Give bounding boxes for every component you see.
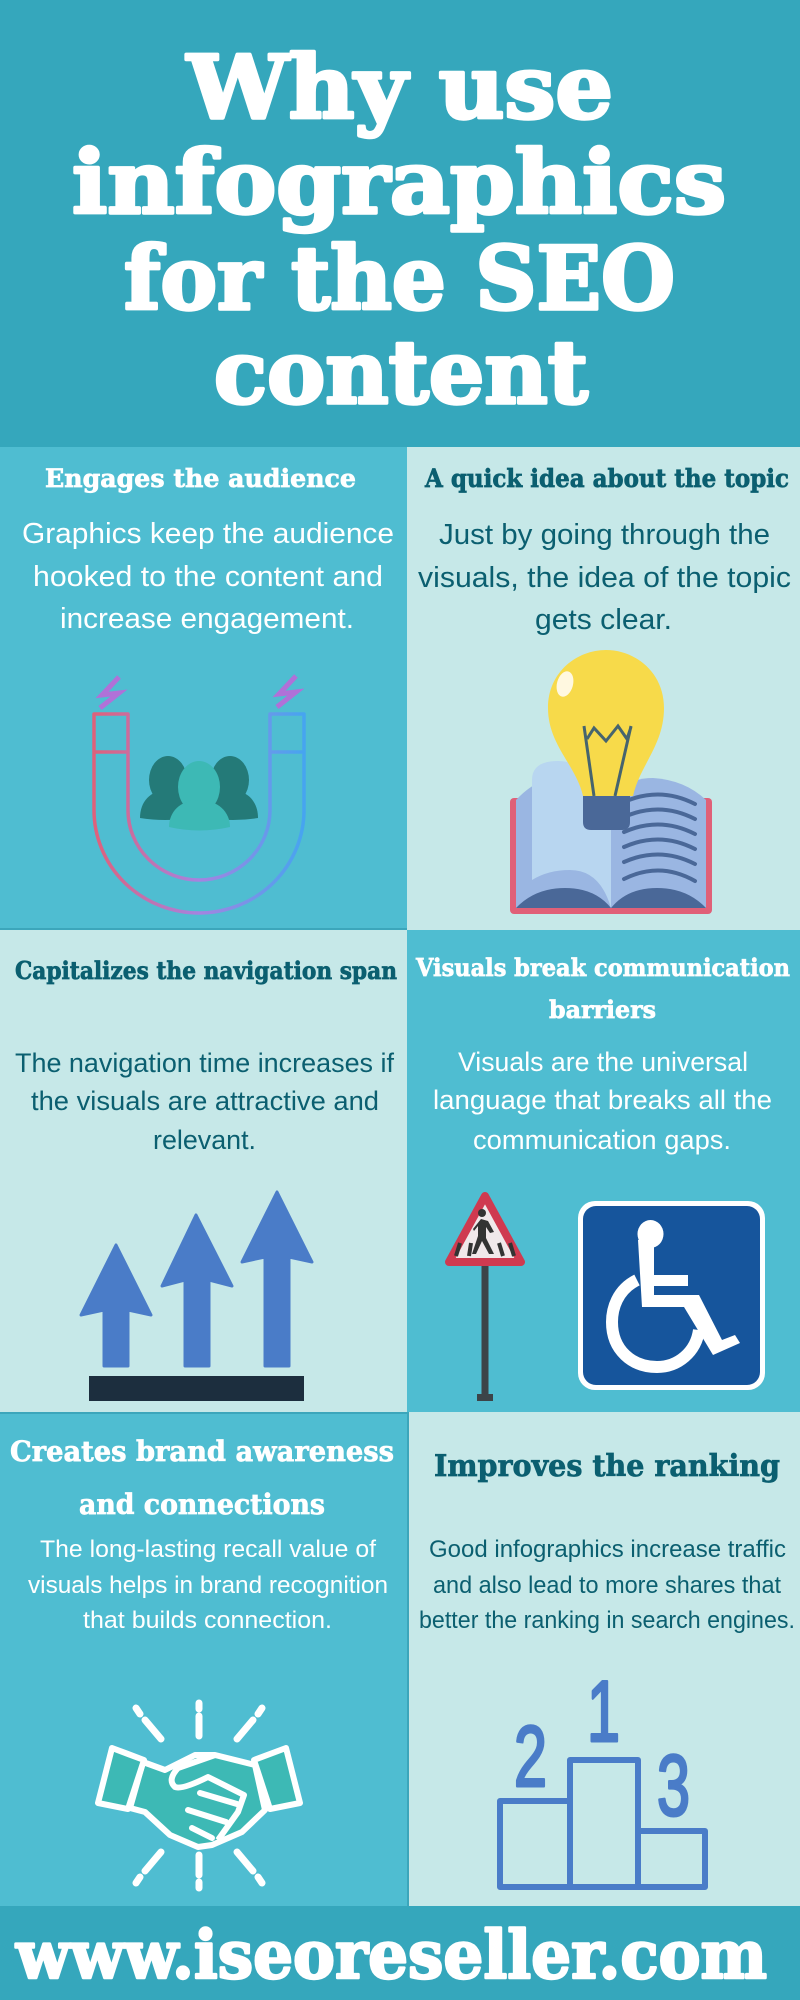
- title: infographics: [72, 131, 726, 234]
- body text: visuals break: communication gaps.: [473, 1125, 731, 1155]
- body text: creates brand awareness: The long-lasting recall value of: [40, 1536, 376, 1563]
- title: [72, 36, 726, 424]
- heading: visuals break: barriers: [549, 995, 656, 1024]
- icon: handshake with rays: [98, 1703, 300, 1888]
- body text: quick idea: Just by going through the: [439, 519, 770, 551]
- title: for the SEO: [124, 227, 675, 330]
- panel: engages the audience: [0, 447, 407, 930]
- body text: visuals break: [433, 1047, 772, 1155]
- heading: improves the ranking: Improves the ranking: [434, 1449, 780, 1484]
- icon: winners podium with ranks: 1: [587, 1664, 620, 1760]
- body text: engages: [22, 518, 394, 635]
- panel: a quick idea about the topic: [407, 447, 800, 930]
- body text: creates brand awareness: [28, 1536, 388, 1634]
- body text: improves the ranking: and also lead to more shares that: [433, 1572, 781, 1599]
- body text: improves the ranking: better the ranking in search engines.: [419, 1607, 795, 1634]
- body text: quick idea: gets clear.: [535, 604, 672, 636]
- heading: capitalizes: Capitalizes the navigation span: [15, 956, 397, 985]
- icon: wheelchair accessibility sign: [578, 1201, 765, 1390]
- panel: capitalizes the navigation span: [0, 930, 407, 1412]
- icon: winners podium with ranks: [500, 1664, 705, 1887]
- icon: three rising arrows: [81, 1192, 312, 1366]
- icon: base bar: [89, 1376, 304, 1401]
- body text: capitalizes: [15, 1048, 394, 1155]
- panel: improves the ranking: [409, 1412, 800, 1906]
- body text: improves the ranking: Good infographics increase traffic: [429, 1536, 786, 1563]
- title: content: [214, 321, 588, 424]
- body text: visuals break: language that breaks all the: [433, 1085, 772, 1115]
- icon: winners podium with ranks: 2: [514, 1709, 547, 1805]
- body text: engages: increase engagement.: [60, 603, 354, 635]
- icon: pedestrian crossing road sign: [449, 1196, 521, 1401]
- title: Why use: [186, 36, 613, 139]
- heading: creates brand awareness: [10, 1435, 394, 1521]
- body text: quick idea: [418, 519, 791, 636]
- body text: engages: hooked to the content and: [33, 561, 383, 593]
- heading: engages the audience: Engages the audience: [45, 464, 356, 493]
- icon: winners podium with ranks: 3: [657, 1738, 690, 1834]
- body text: capitalizes: The navigation time increases if: [15, 1048, 394, 1078]
- body text: engages: Graphics keep the audience: [22, 518, 394, 550]
- body text: improves the ranking: [419, 1536, 795, 1634]
- icon: magnet attracting people: [94, 676, 304, 913]
- body text: capitalizes: relevant.: [153, 1125, 256, 1155]
- body text: creates brand awareness: visuals helps in brand recognition: [28, 1572, 388, 1599]
- panel: creates brand awareness: [0, 1412, 409, 1906]
- body text: visuals break: Visuals are the universal: [458, 1047, 748, 1077]
- footer url: www.iseoreseller.com: [15, 1916, 767, 1994]
- icon: light bulb over open book: [510, 650, 712, 914]
- heading: creates brand awareness: and connections: [79, 1488, 325, 1521]
- heading: visuals break: [415, 953, 790, 1024]
- heading: creates brand awareness: Creates brand awareness: [10, 1435, 394, 1468]
- panel: visuals break communication barriers: [407, 930, 800, 1412]
- body text: creates brand awareness: that builds connection.: [83, 1607, 332, 1634]
- body text: capitalizes: the visuals are attractive and: [31, 1086, 379, 1116]
- body text: quick idea: visuals, the idea of the topic: [418, 562, 791, 594]
